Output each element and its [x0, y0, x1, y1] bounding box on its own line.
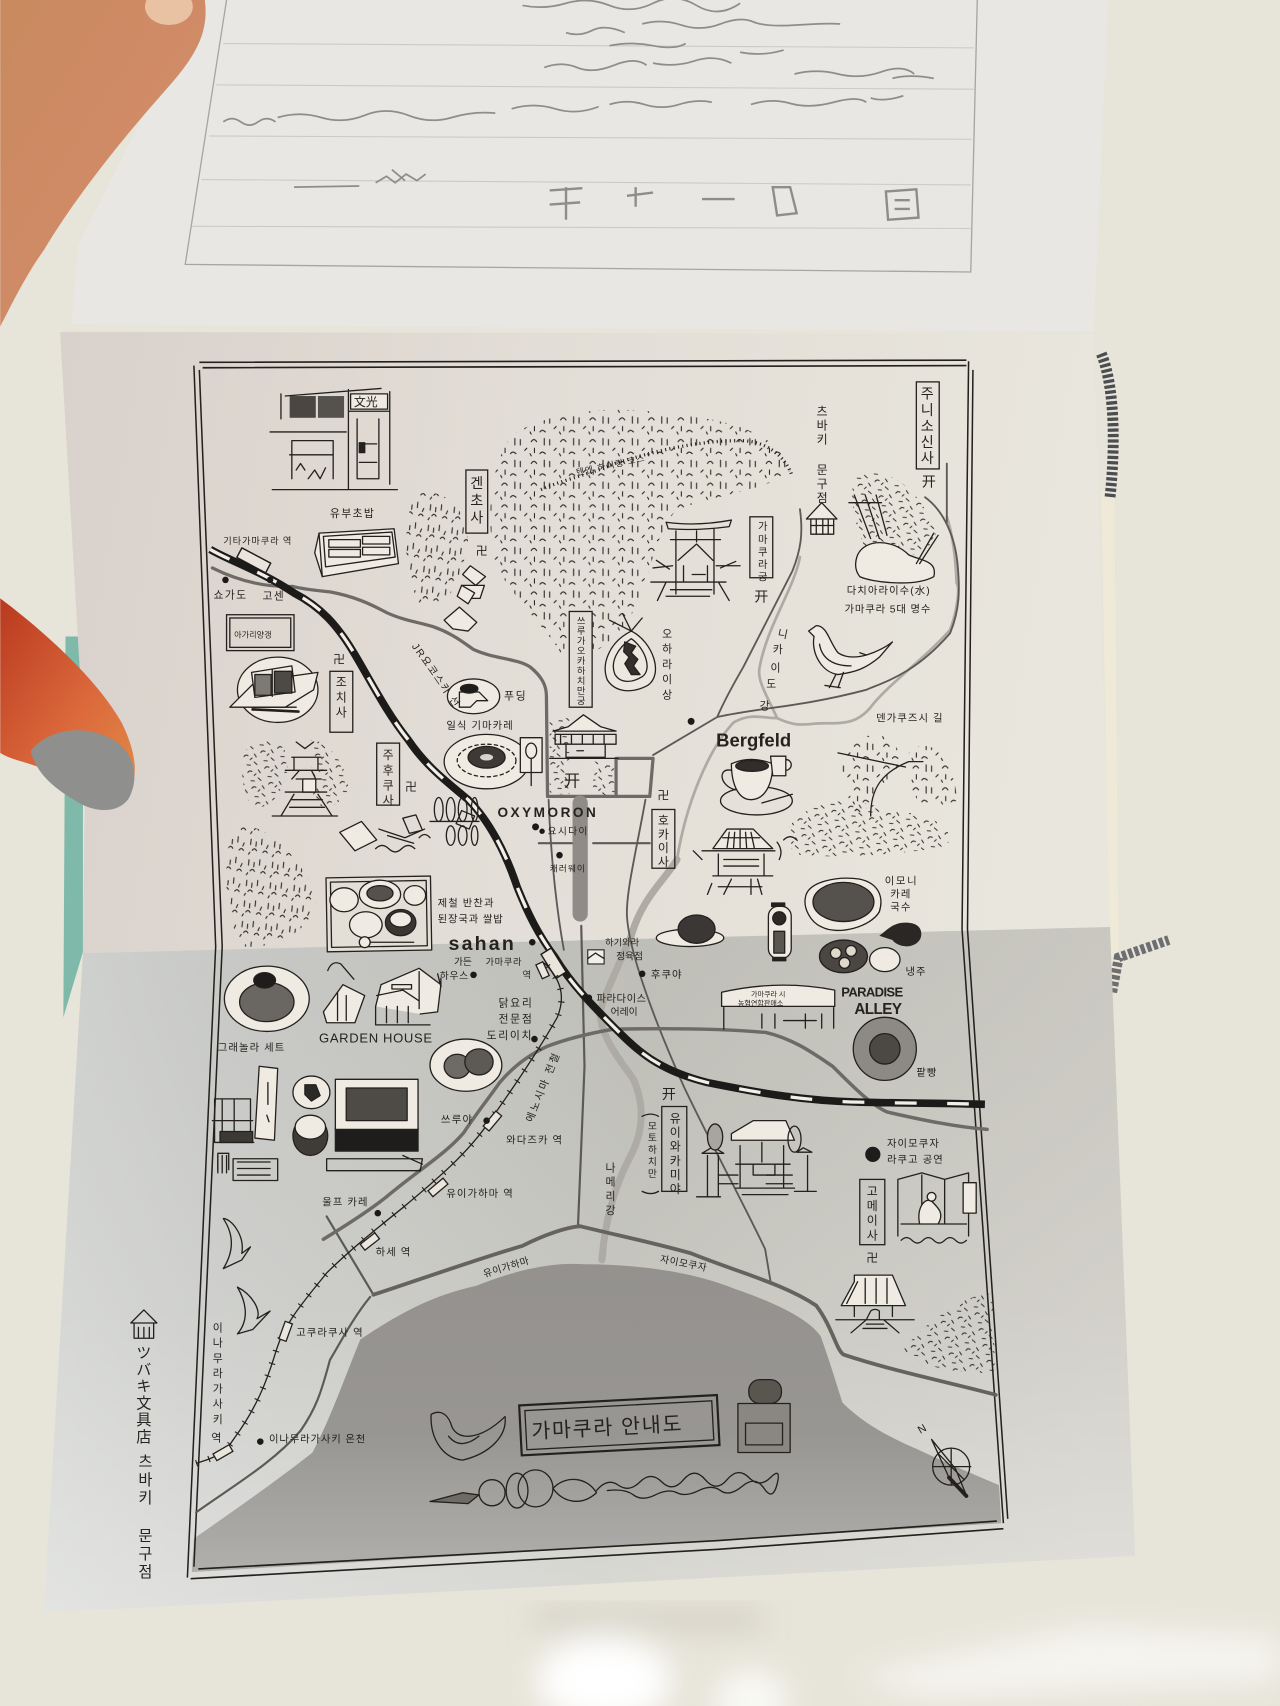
Junisho shrine label: 주니소신사 — [919, 386, 935, 467]
bento box of inari sushi — [315, 529, 398, 577]
restaurant sign building — [212, 1066, 278, 1180]
top-left shop building — [270, 388, 397, 490]
Paradise alley label — [586, 993, 647, 1018]
Kencho temple label — [466, 470, 488, 533]
Jufuku temple label — [377, 743, 400, 809]
bird sketches — [223, 1219, 270, 1334]
road label dengaku zushi: 덴가쿠즈시 길 — [876, 711, 944, 724]
Tsubaki house icon — [806, 503, 837, 534]
silver nail — [31, 730, 134, 810]
Yui Wakamiya label — [642, 1086, 687, 1197]
zaimokuza rakugo label: 라쿠고 공연 — [887, 1154, 944, 1166]
Komyo temple drawing — [836, 1275, 914, 1333]
small torii: 开 — [754, 589, 768, 605]
seasonal sides caption — [438, 897, 504, 926]
Choji temple label — [330, 671, 353, 732]
Caraway label — [550, 852, 586, 873]
plate with two croquettes — [430, 1039, 502, 1091]
Nikaido river label: 도 — [766, 679, 776, 691]
compass pen — [932, 1439, 971, 1496]
Komyo temple label — [860, 1179, 885, 1245]
Paradise alley label: 어레이 — [611, 1006, 638, 1018]
卍 jufuku: 卍 — [405, 780, 417, 794]
tachiarai water label — [845, 585, 931, 616]
cake plate — [230, 657, 318, 722]
Bergfeld logo: Bergfeld — [716, 729, 791, 750]
PARADISE ALLEY logo: PARADISE — [841, 985, 903, 1000]
chicken restaurant label: 도리이치 — [487, 1029, 533, 1042]
chicken restaurant label: 전문점 — [499, 1013, 533, 1026]
Kencho temple small buildings — [444, 566, 486, 631]
yokosuka road — [323, 1029, 987, 1239]
farmers market building: 가마쿠라 시 — [751, 990, 785, 999]
Hagiwara butcher: 하기와라 — [605, 936, 640, 947]
Nikaido river label: 니 — [776, 627, 789, 642]
hiking course label: 텐엔 하이킹 코스 — [575, 452, 646, 477]
seasonal sides caption: 된장국과 쌀밥 — [438, 914, 504, 926]
label: gokurakuji station: 고쿠라쿠사 역 — [296, 1327, 364, 1339]
Nikaido river label: 카 — [773, 643, 783, 656]
station dots and Shogado/Kosen: 고센 — [262, 589, 285, 602]
hiking dotted path — [541, 441, 792, 490]
small torii junisho: 开 — [922, 473, 936, 489]
handwritten letter lines — [223, 0, 934, 125]
decorative pen brush — [430, 1470, 778, 1508]
counter reflections — [533, 1612, 1280, 1706]
waterfall and pond with brush — [849, 495, 938, 583]
lower finger — [0, 598, 135, 792]
Hachimangu main hall — [550, 715, 618, 758]
Hokai temple label — [652, 789, 675, 870]
shop name korean: 츠바키 문구점 — [135, 1454, 152, 1582]
map dot — [688, 718, 695, 725]
label: wolf curry — [322, 1197, 381, 1216]
label: tsuruya: 쓰루야 — [441, 1114, 473, 1126]
nameri river label: 나메리강 — [604, 1162, 616, 1219]
road label zaimokuza: 자이모쿠자 — [659, 1253, 708, 1274]
chicken restaurant label: 닭요리 — [499, 996, 533, 1009]
map page upper half — [60, 332, 1110, 953]
inamuragasaki station end glyph: 역 — [211, 1432, 221, 1445]
kamakura station label — [486, 957, 531, 980]
kamakura station label: 역 — [522, 970, 531, 980]
anpan round bun — [853, 1017, 916, 1080]
garden house label — [440, 956, 477, 982]
granola set label: 그래놀라 세트 — [218, 1042, 285, 1054]
pagoda — [272, 742, 338, 816]
train stations — [237, 548, 566, 978]
label: pudding: 푸딩 — [504, 690, 527, 703]
map sea area — [192, 1264, 1001, 1572]
Kamakura shrine label: 가마쿠라궁 — [755, 521, 767, 584]
unagi box — [327, 1079, 422, 1171]
mountain forest — [490, 410, 792, 656]
label: hase station: 하세 역 — [376, 1246, 411, 1259]
Oharai festival label: 오하라이상 — [660, 628, 672, 704]
shop name japanese: ツバキ文具店 — [133, 1345, 155, 1445]
Choji temple label: 조치사 — [334, 676, 348, 721]
cup of cold sake — [870, 948, 900, 972]
Tsubaki stationery vertical label: 츠바키 문구점 — [815, 404, 829, 506]
upside-down signature — [294, 170, 426, 187]
map page lower half — [44, 927, 1135, 1612]
Junisho shrine label — [916, 382, 939, 469]
PARADISE ALLEY logo — [841, 985, 903, 1018]
OXYMORON label: OXYMORON — [497, 805, 598, 820]
tachiarai water label: 다치아라이수(水) — [847, 585, 931, 597]
grey wakamiya avenue — [573, 803, 587, 914]
zaimokuza rakugo label — [865, 1138, 944, 1166]
sweets label box — [227, 615, 294, 651]
shimenawa rope ring — [605, 614, 655, 691]
Paradise alley label: 파라다이스 — [596, 993, 647, 1005]
side dish and soup — [293, 1076, 330, 1155]
book edge and teal cover strip — [63, 490, 1119, 1017]
letter sheet at top — [71, 0, 1108, 332]
hands holding the book — [0, 0, 206, 810]
PARADISE ALLEY logo: ALLEY — [854, 1001, 902, 1018]
Enoden railway — [196, 962, 561, 1463]
label: tsuruya — [441, 1114, 490, 1126]
imoni curry noodle label: 카레 — [890, 889, 911, 901]
ribbon bookmark — [1101, 354, 1169, 992]
Kencho temple label: 겐초사 — [469, 475, 485, 528]
chicken restaurant label — [487, 996, 538, 1042]
label: wadazuka station: 와다즈카 역 — [506, 1134, 563, 1146]
Kamakura shrine label — [750, 517, 773, 584]
granola plate — [224, 966, 309, 1031]
noodle bowl — [805, 878, 881, 930]
Hokai temple drawing — [693, 829, 797, 894]
map frame — [187, 360, 1008, 1579]
lantern — [768, 903, 791, 961]
icon: shop house — [131, 1310, 157, 1338]
Fukuya label — [639, 969, 683, 981]
Fukuya label: 후쿠야 — [651, 969, 683, 981]
cold sake label: 냉주 — [905, 966, 927, 978]
garden house label: 하우스 — [440, 969, 469, 982]
Hagiwara butcher: 정육점 — [616, 951, 643, 963]
anpan label: 팥빵 — [916, 1067, 938, 1079]
compass N: N — [916, 1422, 929, 1437]
Tsurugaoka Hachimangu label — [569, 611, 592, 707]
GARDEN HOUSE caption: GARDEN HOUSE — [319, 1030, 433, 1045]
dove — [809, 626, 892, 688]
map title box: 가마쿠라 안내도 — [531, 1413, 684, 1444]
label: kita-kamakura station: 기타가마쿠라 역 — [223, 536, 292, 546]
top hand — [0, 0, 206, 326]
Nikaido river label: 강 — [760, 699, 770, 712]
sahan logo: sahan — [449, 933, 516, 955]
sweets label box: 아가리양갱 — [234, 630, 272, 640]
map title box — [519, 1395, 720, 1455]
label: inamuragasaki station: 이나무라가사키 — [211, 1322, 223, 1429]
卍 choji: 卍 — [333, 653, 345, 667]
label: enoshima electric line: 에노시마 전철 — [524, 1050, 563, 1124]
Tsurugaoka torii and shrine — [651, 520, 740, 601]
卍 kencho: 卍 — [476, 544, 488, 558]
sake vessel — [879, 923, 921, 946]
label: wolf curry: 울프 카레 — [322, 1197, 369, 1209]
curry plate and spoon — [444, 734, 542, 789]
forest textures — [226, 410, 995, 1373]
meal tray — [326, 876, 432, 952]
pudding plate — [447, 679, 500, 714]
imoni curry noodle label: 국수 — [890, 902, 911, 914]
coast road — [373, 1226, 996, 1395]
label: inari sushi: 유부초밥 — [330, 507, 375, 520]
Yoshidaiya label: 요시다이 — [548, 826, 589, 838]
station dots and Shogado/Kosen — [214, 577, 285, 602]
coffee cup and saucer — [721, 756, 792, 815]
road label yuigahama: 유이가하마 — [481, 1254, 531, 1280]
label: inamuragasaki onsen: 이나무라가사키 온천 — [269, 1434, 366, 1446]
卍 komyo: 卍 — [866, 1251, 878, 1265]
imoni curry noodle label — [885, 876, 918, 914]
Tsurugaoka Hachimangu label: 쓰루가오카하치만궁 — [575, 616, 585, 706]
Nikaido river label: 이 — [771, 661, 781, 674]
upper plaza road — [212, 568, 653, 796]
light rivers — [677, 517, 958, 860]
thin roads — [653, 463, 959, 755]
dumpling dish — [820, 940, 867, 973]
Yoshidaiya label — [532, 823, 589, 838]
label: japanese curry: 일식 기마카레 — [446, 720, 514, 732]
JR Yokosuka line label: JR요코스카 선 — [409, 641, 463, 710]
JR railway — [210, 548, 985, 1104]
Hokai temple label: 호카이사 — [656, 813, 670, 870]
label: yuigahama station: 유이가하마 역 — [446, 1187, 514, 1200]
farmers market building — [722, 985, 835, 1029]
zaimokuza rakugo label: 자이모쿠자 — [887, 1138, 940, 1150]
Yui Wakamiya label: 모토하치만 — [645, 1121, 657, 1180]
upside-down letter heading — [550, 187, 919, 220]
imoni curry noodle label: 이모니 — [885, 876, 918, 888]
Hagiwara butcher — [588, 936, 643, 964]
ink bottle — [738, 1380, 790, 1452]
tachiarai water label: 가마쿠라 5대 명수 — [845, 604, 931, 616]
farmers market building: 농협연합판매소 — [738, 998, 784, 1007]
river and road network — [196, 463, 996, 1512]
Komyo temple label: 고메이사 — [865, 1185, 879, 1244]
Caraway label: 캐러웨이 — [550, 862, 586, 873]
seasonal sides caption: 제철 반찬과 — [438, 897, 495, 909]
Yui Wakamiya label: 유이와카미야 — [668, 1112, 682, 1197]
Jufuku temple label: 주후쿠사 — [381, 749, 395, 809]
Nikaido river label — [760, 627, 789, 712]
top-left shop building: 文光 — [354, 395, 378, 409]
Yui Wakamiya shrine drawing — [697, 1121, 816, 1197]
title bird — [431, 1412, 505, 1460]
kamakura station label: 가마쿠라 — [486, 957, 522, 967]
braised dish plate — [656, 915, 724, 947]
temple and cedar trees — [340, 798, 479, 852]
folding screen with rakugo storyteller — [898, 1173, 976, 1243]
garden house label: 가든 — [454, 956, 472, 968]
Yui Wakamiya label: 开 — [662, 1086, 676, 1102]
Garden House building — [323, 963, 441, 1025]
forest path structure — [838, 753, 923, 816]
shop footer vertical — [131, 1310, 157, 1445]
torii gate: 开 — [564, 773, 580, 791]
Hokai temple label: 卍 — [657, 789, 669, 803]
station dots and Shogado/Kosen: 쇼가도 — [214, 588, 247, 601]
